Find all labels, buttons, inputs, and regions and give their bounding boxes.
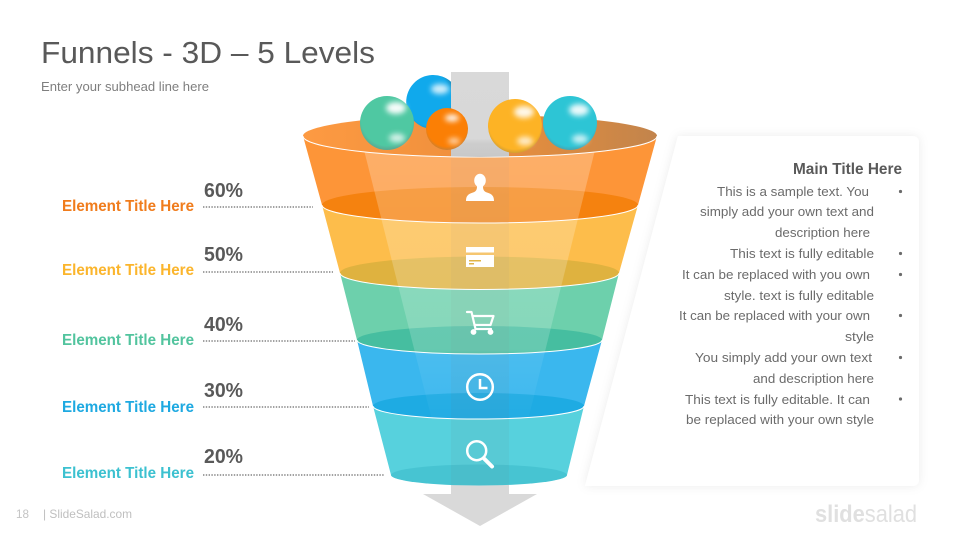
funnel rim xyxy=(303,115,657,157)
label row: 50%: Element Title Here xyxy=(62,262,194,279)
label row: 60%: 60% xyxy=(204,180,243,202)
panel bullet text: You simply add your own text xyxy=(695,350,872,365)
level 4 floor xyxy=(373,393,584,419)
panel bullet text: be replaced with your own style xyxy=(686,412,874,427)
panel bullet text: simply add your own text and xyxy=(700,204,874,219)
label row: 40%: 40% xyxy=(204,314,243,336)
level 3 body xyxy=(340,273,619,354)
panel bullet text: style xyxy=(845,329,874,344)
ball: yellow xyxy=(488,99,542,153)
level 2 body xyxy=(322,205,638,290)
title: Funnels - 3D – 5 Levels xyxy=(41,35,375,70)
level 5 floor xyxy=(391,464,567,486)
level 5 body xyxy=(373,406,584,485)
panel bullet text: This is a sample text. You xyxy=(717,184,869,199)
balls xyxy=(360,75,597,153)
panel: description card xyxy=(585,136,919,486)
label row: 50%: 50% xyxy=(204,244,243,266)
ball: orange xyxy=(426,108,468,150)
subhead: Enter your subhead line here xyxy=(41,80,209,94)
label row: 20%: Element Title Here xyxy=(62,465,194,482)
footer page number: 18 xyxy=(16,507,29,521)
level 3 floor xyxy=(357,326,602,354)
panel bullet text: description here xyxy=(775,225,870,240)
footer site: | SlideSalad.com xyxy=(43,507,132,521)
panel bullet text: It can be replaced with you own xyxy=(682,267,870,282)
funnel xyxy=(303,115,657,487)
panel bullet text: This text is fully editable. It can xyxy=(685,392,870,407)
label row: 30%: 30% xyxy=(204,380,243,402)
icon: clock xyxy=(467,374,493,400)
panel bullet text: This text is fully editable xyxy=(730,246,874,261)
level 4 body xyxy=(357,340,602,419)
logo: slidesalad xyxy=(815,501,917,528)
label row: 60%: Element Title Here xyxy=(62,198,194,215)
panel bullet text xyxy=(679,184,874,427)
ball: blue xyxy=(406,75,451,129)
label row: 30% xyxy=(62,380,369,416)
arrow shaft top xyxy=(451,72,509,157)
rim edge lines xyxy=(303,136,657,419)
label row: 30%: Element Title Here xyxy=(62,399,194,416)
panel bullet text: style. text is fully editable xyxy=(724,288,874,303)
label row: 40%: Element Title Here xyxy=(62,332,194,349)
level 1 floor xyxy=(322,187,638,223)
label row: 40% xyxy=(62,314,355,349)
label row: 60% xyxy=(62,180,313,215)
ball: teal xyxy=(543,96,597,150)
arrow base xyxy=(423,480,537,526)
panel bullet text: It can be replaced with your own xyxy=(679,308,870,323)
label row: 50% xyxy=(62,244,333,279)
icon: shopping cart xyxy=(467,312,494,334)
label row: 20% xyxy=(62,446,385,482)
icon: person xyxy=(466,174,494,201)
level 1 body xyxy=(303,136,657,223)
ball: green xyxy=(360,96,414,150)
light beam xyxy=(364,150,595,420)
icon: credit card xyxy=(466,247,494,267)
panel heading: Main Title Here xyxy=(793,161,902,178)
arrow seen through funnel xyxy=(451,360,509,394)
label row: 20%: 20% xyxy=(204,446,243,468)
panel bullets xyxy=(899,190,902,401)
icon: magnifier xyxy=(467,441,492,466)
panel bullet text: and description here xyxy=(753,371,874,386)
level 2 floor xyxy=(340,256,619,290)
